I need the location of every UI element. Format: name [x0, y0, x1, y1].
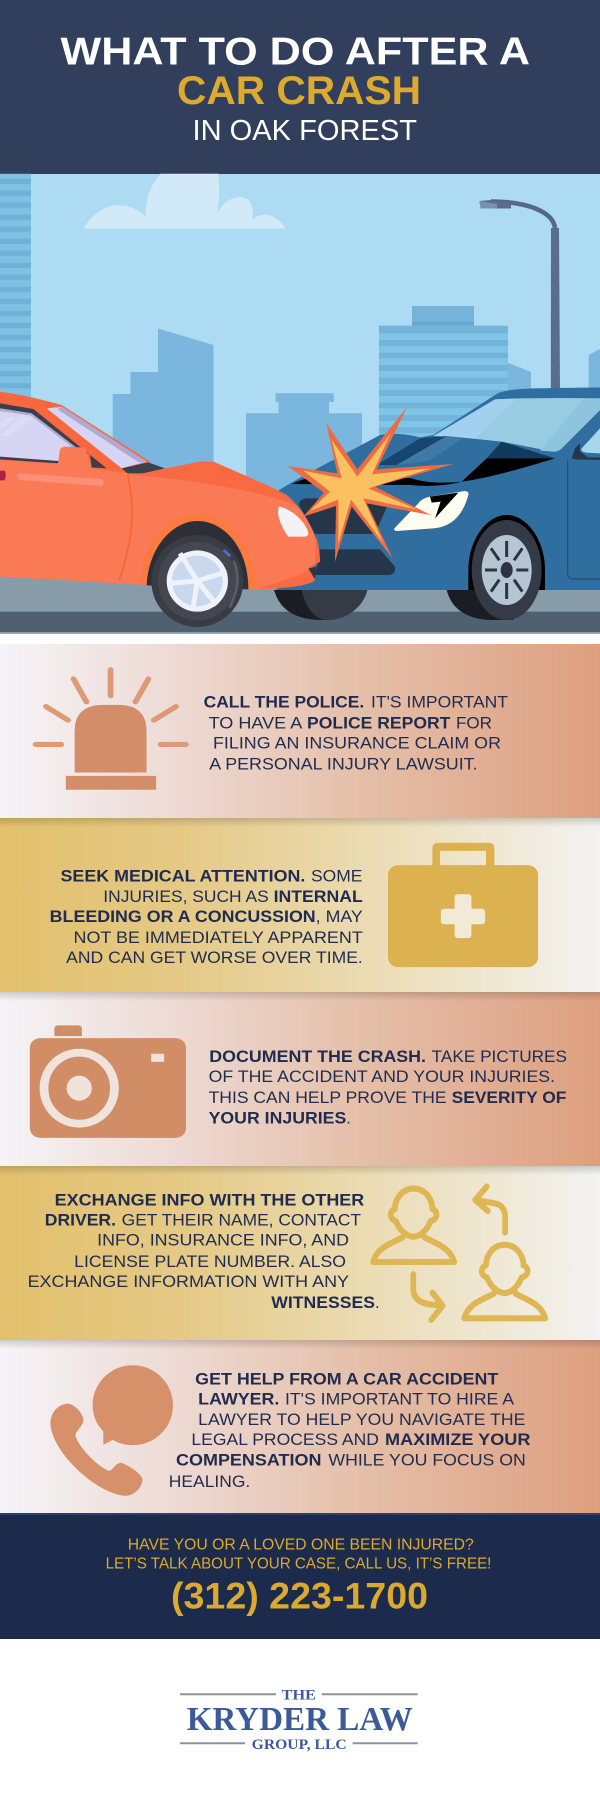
- text: document the crash: [209, 1048, 567, 1127]
- panel 1: call the police: [0, 644, 600, 818]
- rim spokes: [168, 553, 227, 611]
- headlight: [278, 507, 308, 537]
- person two: [464, 1245, 545, 1318]
- text: call the police: [204, 694, 508, 774]
- left striped tower: [0, 174, 31, 398]
- text: document the crash: SEVERITY OF: [452, 1089, 566, 1107]
- blue body: [277, 387, 600, 590]
- door handle: [0, 471, 6, 480]
- door line: [119, 475, 132, 580]
- logo: the kryder law group: [180, 1688, 418, 1753]
- panel 5: get help from a lawyer: [0, 1340, 600, 1513]
- cta text line two: LET’S TALK ABOUT YOUR CASE, CALL US, IT’S FREE!: [106, 1556, 491, 1572]
- text: seek medical attention: INTERNAL: [274, 888, 363, 906]
- rim spokes: [485, 541, 528, 599]
- blue car front wheel: [274, 590, 367, 620]
- rear wheel: [468, 515, 545, 590]
- speech bubble: [93, 1365, 173, 1445]
- text: call the police: POLICE REPORT: [307, 714, 450, 732]
- text: document the crash: TAKE PICTURES: [432, 1048, 567, 1066]
- city buildings: [113, 328, 600, 490]
- body: [0, 460, 320, 589]
- windshield: [47, 407, 147, 468]
- person one: [373, 1189, 454, 1262]
- text: get help from a lawyer: LEGAL PROCESS AND: [191, 1431, 379, 1449]
- text: get help from a lawyer: IT'S IMPORTANT TO HIRE A: [285, 1390, 514, 1408]
- text: get help from a lawyer: COMPENSATION: [176, 1452, 322, 1470]
- phone number: (312) 223-1700: [171, 1576, 428, 1616]
- text: exchange info: INFO, INSURANCE INFO, AND: [97, 1232, 349, 1250]
- text: seek medical attention: NOT BE IMMEDIATELY APPARENT: [74, 929, 363, 947]
- text: get help from a lawyer: MAXIMIZE YOUR: [385, 1431, 530, 1449]
- text: call the police: FOR: [456, 714, 492, 732]
- arrow down: [413, 1274, 443, 1320]
- grille: [299, 498, 391, 534]
- icon: two people exchanging info: [373, 1187, 545, 1320]
- door outline: [568, 460, 600, 579]
- text: exchange info: [28, 1192, 380, 1312]
- handset: [50, 1404, 142, 1496]
- text: seek medical attention: BLEEDING OR A CONCUSSION: [50, 908, 316, 926]
- text: call the police: CALL THE POLICE.: [204, 694, 364, 712]
- headlight: [394, 491, 469, 531]
- street lamp: [479, 200, 560, 390]
- text: document the crash: YOUR INJURIES: [209, 1109, 346, 1127]
- wheel arch: [140, 513, 256, 589]
- icon: phone and speech bubble: [50, 1365, 173, 1496]
- roof and pillars: [0, 392, 150, 475]
- header band: [0, 0, 600, 174]
- text: exchange info: .: [375, 1294, 380, 1312]
- bumper: [315, 549, 395, 575]
- text: get help from a lawyer: GET HELP FROM A CAR ACCIDENT: [195, 1370, 498, 1388]
- text: seek medical attention: SOME: [311, 868, 362, 886]
- call to action band: [0, 1513, 600, 1639]
- side strip: [17, 473, 103, 486]
- text: seek medical attention: [50, 868, 363, 967]
- panel 3: document the crash: [0, 992, 600, 1166]
- subtitle: in oak forest: IN OAK FOREST: [192, 115, 417, 147]
- title line: car crash: CAR CRASH: [177, 69, 421, 113]
- text: exchange info: DRIVER.: [45, 1212, 116, 1230]
- crumpled hood: [377, 436, 447, 465]
- valve mark: [225, 551, 229, 555]
- panel 4: exchange info: [0, 1166, 600, 1340]
- cta text line one: HAVE YOU OR A LOVED ONE BEEN INJURED?: [128, 1536, 474, 1554]
- text: exchange info: EXCHANGE INFO WITH THE OTHER: [55, 1192, 364, 1210]
- windshield: [433, 398, 600, 452]
- text: call the police: TO HAVE A: [209, 714, 302, 732]
- road: [0, 560, 600, 634]
- bumper gap: [308, 567, 316, 579]
- title line: what to do after a: WHAT TO DO AFTER A: [60, 30, 530, 74]
- icon: first aid kit: [388, 843, 538, 967]
- icon: police siren: [36, 670, 186, 790]
- text: exchange info: LICENSE PLATE NUMBER. ALSO: [74, 1253, 346, 1271]
- front bumper shade: [257, 563, 319, 588]
- text: get help from a lawyer: LAWYER TO HELP YOU NAVIGATE THE: [198, 1411, 525, 1429]
- hood top shade: [128, 462, 298, 507]
- side window: [0, 403, 107, 468]
- tire highlight: [230, 562, 238, 607]
- text: seek medical attention: INJURIES, SUCH AS: [103, 888, 269, 906]
- orange car: [0, 392, 320, 627]
- text: get help from a lawyer: HEALING.: [169, 1473, 250, 1491]
- panel 2: seek medical attention: [0, 818, 600, 992]
- text: call the police: A PERSONAL INJURY LAWSUIT.: [209, 756, 478, 774]
- text: call the police: IT'S IMPORTANT: [371, 694, 508, 712]
- text: seek medical attention: AND CAN GET WORSE OVER TIME.: [66, 949, 363, 967]
- logo: the kryder law group: KRYDER LAW: [187, 1701, 413, 1738]
- hood tear: [487, 442, 555, 458]
- text: seek medical attention: SEEK MEDICAL ATTENTION.: [60, 868, 305, 886]
- icon: camera: [30, 1025, 186, 1138]
- text: exchange info: WITNESSES: [271, 1294, 375, 1312]
- text: exchange info: EXCHANGE INFORMATION WITH ANY: [28, 1273, 349, 1291]
- text: document the crash: DOCUMENT THE CRASH.: [209, 1048, 426, 1066]
- text: document the crash: THIS CAN HELP PROVE THE: [209, 1089, 447, 1107]
- blue car: [274, 387, 600, 620]
- arrow up: [475, 1187, 505, 1233]
- logo: the kryder law group: THE: [282, 1688, 316, 1704]
- impact starburst: [288, 407, 453, 562]
- text: call the police: FILING AN INSURANCE CLAIM OR: [213, 734, 501, 752]
- logo: the kryder law group: GROUP, LLC: [252, 1737, 347, 1753]
- text: document the crash: .: [346, 1109, 351, 1127]
- sky: [0, 174, 600, 594]
- text: seek medical attention: , MAY: [316, 908, 363, 926]
- text: get help from a lawyer: [169, 1370, 530, 1491]
- text: exchange info: GET THEIR NAME, CONTACT: [122, 1212, 361, 1230]
- tire: [151, 535, 243, 627]
- blue car rear wheel shadow: [447, 590, 513, 620]
- striped high rise: [379, 306, 508, 444]
- cloud: [84, 174, 285, 228]
- mirror: [57, 447, 92, 468]
- side window: [581, 428, 600, 453]
- text: get help from a lawyer: WHILE YOU FOCUS ON: [328, 1452, 526, 1470]
- rim: [167, 550, 228, 612]
- illustration: car crash scene: [0, 174, 600, 634]
- text: document the crash: OF THE ACCIDENT AND YOUR INJURIES.: [209, 1068, 555, 1086]
- text: get help from a lawyer: LAWYER.: [198, 1390, 279, 1408]
